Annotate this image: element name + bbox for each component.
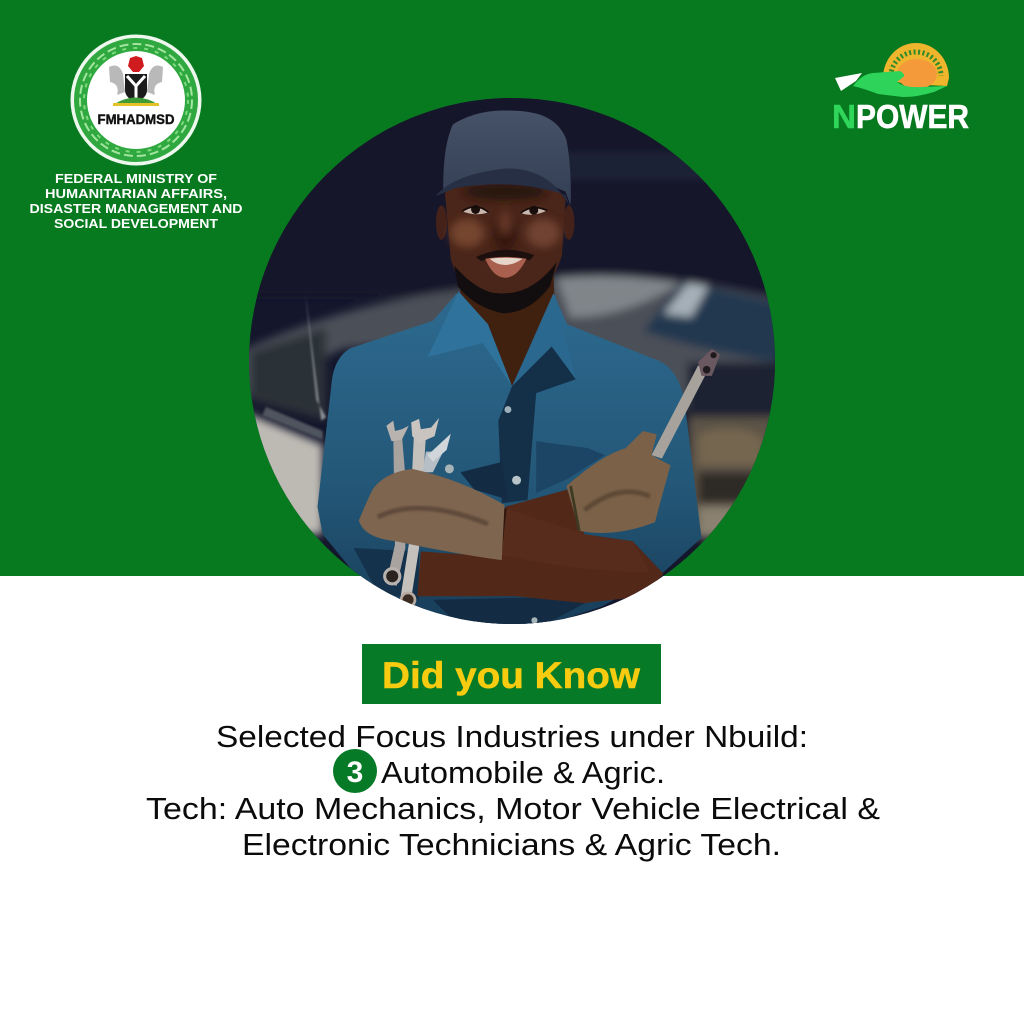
body text: Automobile & Agric. [381,755,665,790]
body text [146,719,880,862]
dark placket and shadows [498,347,576,503]
beard [454,262,557,313]
workshop background [240,90,780,538]
ministry name: DISASTER MANAGEMENT AND [30,202,242,216]
forearms [417,490,664,603]
NPower logo: POWER [856,98,969,135]
body text: Electronic Technicians & Agric Tech. [242,827,781,862]
body text: Tech: Auto Mechanics, Motor Vehicle Electrical & [146,791,880,826]
ears [436,205,447,240]
eyes [462,208,488,214]
"Did you Know" banner [362,644,661,704]
cap [443,111,571,205]
ministry logo [70,34,202,166]
collar [428,291,512,386]
wrenches in left hand [385,418,451,607]
neck [460,269,555,386]
green header background [0,0,1024,576]
badge: number 3 [333,749,377,793]
photo: mechanic in circle [240,90,780,630]
face [445,184,566,294]
badge: number 3: 3 [347,756,363,789]
icon: coat of arms [109,56,163,106]
shirt [317,293,701,627]
wordmark: N [832,98,856,135]
ministry name: SOCIAL DEVELOPMENT [54,217,218,231]
ministry name: HUMANITARIAN AFFAIRS, [45,187,227,201]
moustache and mouth [476,250,534,261]
icon: hand [835,71,947,97]
mechanic figure [317,111,720,627]
gloves [359,469,504,560]
ministry name: FEDERAL MINISTRY OF [55,172,217,186]
icon: sun [883,43,949,89]
"Did you Know" banner: Did you Know [382,655,640,696]
NPower logo [832,43,969,135]
body text: Selected Focus Industries under Nbuild: [216,719,808,754]
socket tool in right hand [652,349,720,459]
face highlights [450,183,560,252]
ministry name [30,172,242,231]
logo label: FMHADMSD [98,111,174,127]
buttons [504,406,511,413]
